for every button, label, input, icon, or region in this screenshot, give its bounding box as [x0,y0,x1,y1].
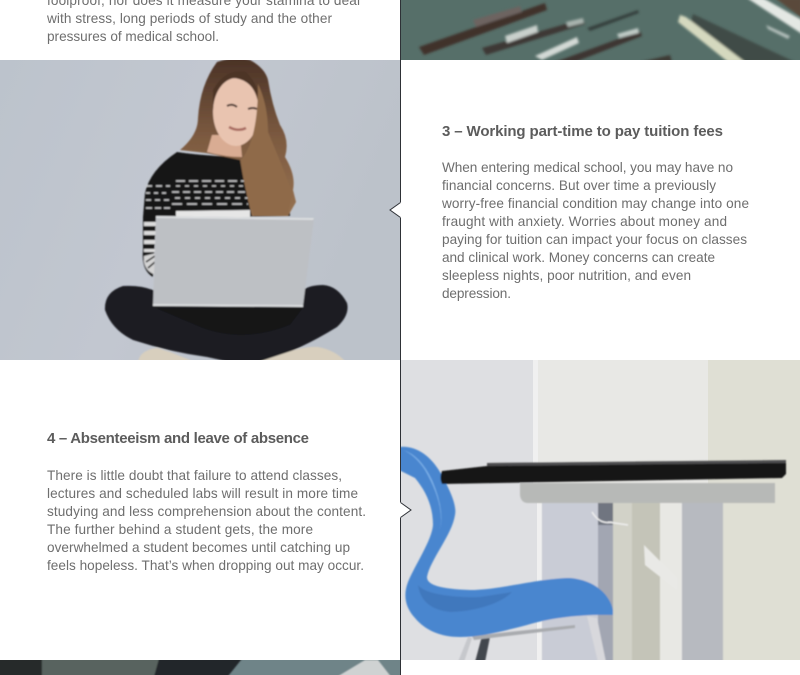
heading: section 4: 4 – Absenteeism and leave of absence [47,430,309,447]
arrow: notch pointing to photo right [400,502,411,518]
photo: next section top strip [0,660,400,675]
text block: section 3: sleepless nights, poor nutrition, and even [442,268,691,283]
chair back and seat [399,447,613,637]
photo: student with laptop [0,58,400,362]
arrow: notch pointing to photo left [390,202,401,218]
shoes [138,346,190,360]
sweater [143,152,290,277]
photo: pens on a green desk [401,0,800,62]
table top [440,461,786,484]
legs [105,285,348,362]
text block: section 4 [47,468,366,573]
text block: section 4: There is little doubt that failure to attend classes, [47,468,342,483]
photo: blue chair at desk [399,360,800,663]
text block: section 2 ending: pressures of medical school. [47,29,219,44]
hair [180,58,296,216]
text block: section 3: worry-free financial condition may change into one [441,196,749,211]
laptop [153,216,314,306]
under-table panel [520,483,775,503]
text block: section 3: When entering medical school, you may have no [442,160,733,175]
text block: section 2 ending [46,0,360,44]
text block: section 3: paying for tuition can impact your focus on classes [442,232,747,247]
heading: section 3: 3 – Working part-time to pay tuition fees [442,123,723,140]
text block: section 2 ending: with stress, long periods of study and the other [46,11,332,26]
text block: section 3: fraught with anxiety. Worries about money and [442,214,727,229]
text block: section 3: and clinical work. Money concerns can create [442,250,715,265]
sweater pattern [146,181,248,208]
center divider with notches [390,0,411,675]
chair legs [458,637,472,660]
text block: section 3: financial concerns. But over time a previously [442,178,716,193]
text block: section 4: overwhelmed a student becomes until catching up [47,540,350,555]
text block: section 4: studying and less comprehension about the content. [47,504,366,519]
text block: section 4: lectures and scheduled labs will result in more time [47,486,358,501]
table legs [542,503,598,663]
text block: section 3 [441,160,749,301]
face [213,78,259,146]
text block: section 3: depression. [442,286,511,301]
hair front lock [242,84,282,168]
text block: section 4: The further behind a student gets, the more [47,522,313,537]
neck [207,135,242,157]
text block: section 4: feels hopeless. That’s when dropping out may occur. [47,558,364,573]
